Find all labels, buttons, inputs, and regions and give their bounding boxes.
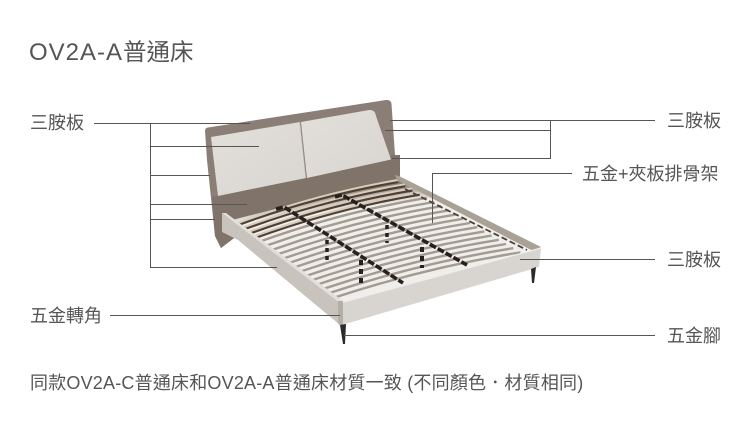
leader lines	[94, 120, 655, 336]
legs	[340, 267, 536, 344]
label: left melamine board: 三胺板	[30, 113, 84, 133]
label: metal legs: 五金腳	[667, 326, 721, 346]
footnote: 同款OV2A-C普通床和OV2A-A普通床材質一致 (不同顏色．材質相同)	[30, 373, 583, 393]
headboard	[205, 100, 400, 248]
slat base	[224, 178, 530, 303]
label: metal corner: 五金轉角	[30, 306, 102, 326]
title: OV2A-A普通床	[29, 39, 194, 66]
label: right melamine board, top: 三胺板	[667, 111, 721, 131]
label: slat frame: 五金+夾板排骨架	[582, 164, 719, 184]
straps	[276, 189, 527, 283]
bed rails	[222, 175, 541, 326]
headboard cushions	[211, 110, 391, 196]
label: right melamine board, lower: 三胺板	[667, 250, 721, 270]
slats	[238, 180, 520, 298]
